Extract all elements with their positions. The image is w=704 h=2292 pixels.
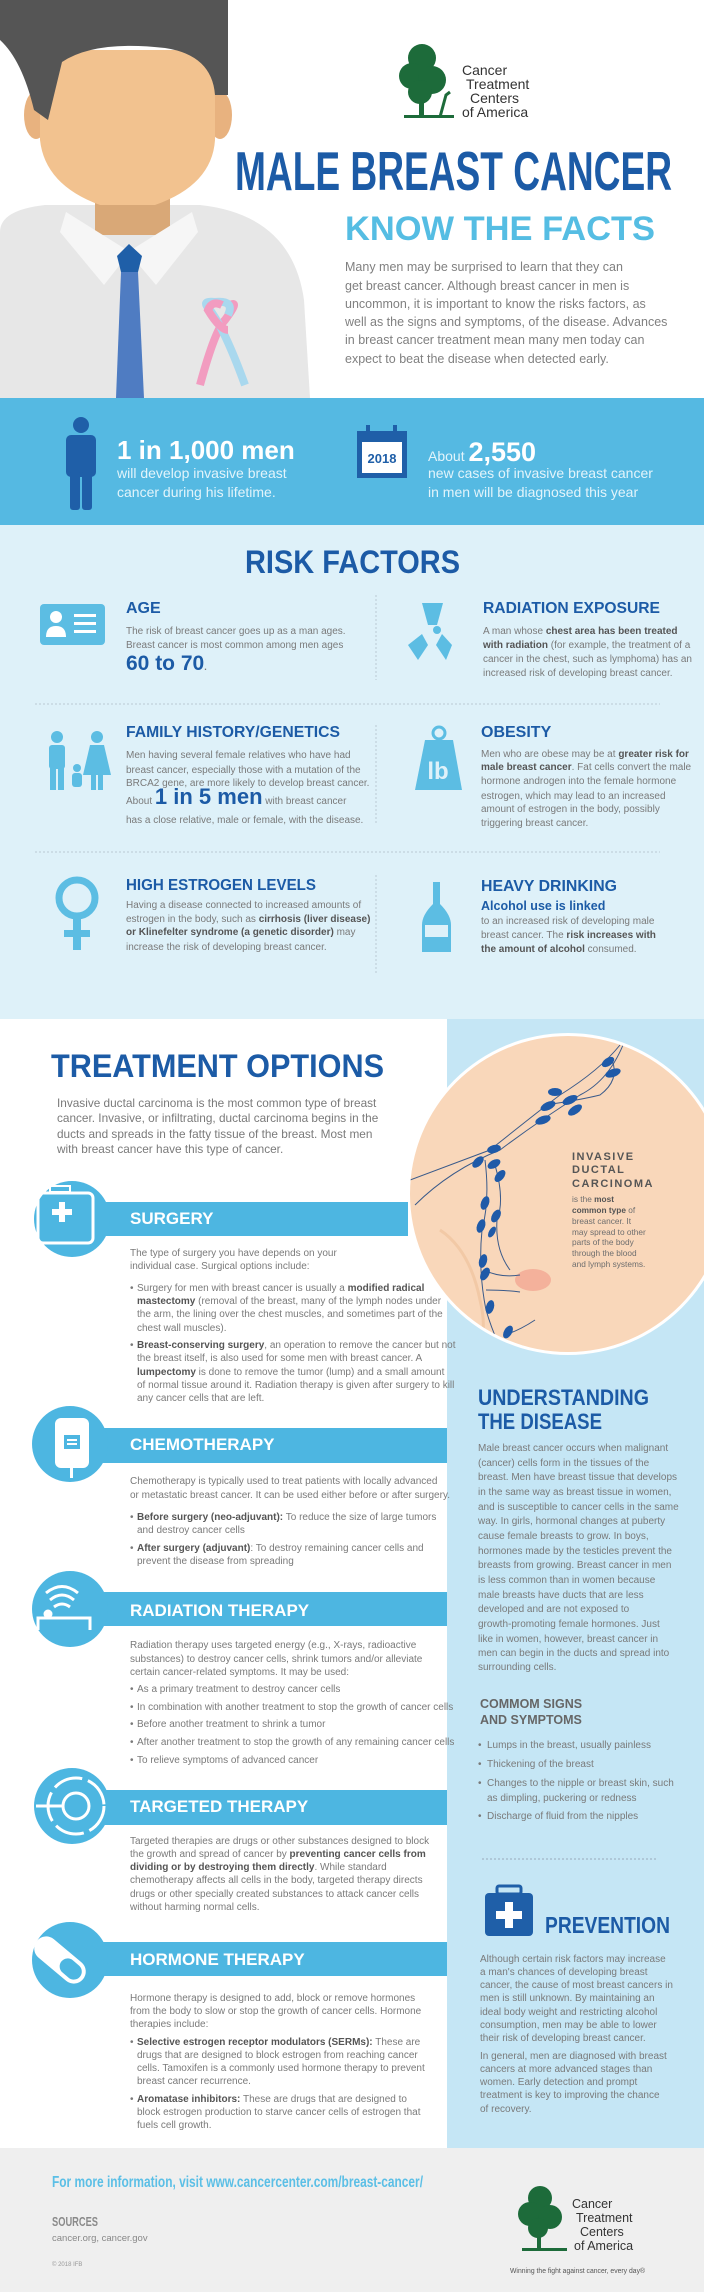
treatment: chemotherapy: Before surgery (neo-adjuvant): To reduce the size of large tumors <box>137 1512 436 1523</box>
icon: calendar 2018 <box>357 425 407 478</box>
treatment: chemotherapy: or metastatic breast cancer. It can be used either before or after surgery. <box>130 1490 450 1501</box>
treatment: radiation therapy: • <box>130 1755 134 1766</box>
risk: heavy drinking: Alcohol use is linked <box>481 899 605 913</box>
section: understanding the disease <box>477 1385 679 1673</box>
icon: calendar 2018: 2018 <box>368 451 396 466</box>
treatment intro: Invasive ductal carcinoma is the most common type of breast <box>57 1096 377 1110</box>
logo top: of America <box>462 104 528 120</box>
stat: 1 in 1,000: 1 in 1,000 men <box>117 435 295 465</box>
intro paragraph: Many men may be surprised to learn that they can <box>345 260 623 274</box>
stat: 1 in 1,000: cancer during his lifetime. <box>117 484 276 500</box>
treatment: radiation therapy: • <box>130 1719 134 1730</box>
risk: family history: BRCA2 gene, are more likely to develop breast cancer. <box>126 778 369 789</box>
footer: SOURCES <box>52 2214 98 2229</box>
section: understanding the disease: way. In girls, hormonal changes at puberty <box>477 1516 665 1527</box>
callout: invasive ductal carcinoma: through the blood <box>572 1248 637 1258</box>
callout: invasive ductal carcinoma: common type of <box>572 1205 636 1215</box>
risk: obesity <box>481 724 692 829</box>
section: common signs and symptoms: Discharge of fluid from the nipples <box>487 1811 638 1822</box>
risk: high estrogen: increase the risk of developing breast cancer. <box>126 942 327 953</box>
risk: radiation exposure: A man whose chest area has been treated <box>483 626 678 637</box>
section: common signs and symptoms: • <box>478 1759 482 1770</box>
intro paragraph: uncommon, it is important to know the risks factors, as <box>345 297 646 311</box>
treatment: surgery: SURGERY <box>130 1209 214 1228</box>
risk: family history: breast cancer, especially those with a mutation of the <box>126 765 361 776</box>
icon: female symbol <box>59 880 95 950</box>
footer: cancer.org, cancer.gov <box>52 2233 148 2244</box>
treatment: hormone therapy <box>29 1922 447 2131</box>
section: prevention: cancer, the cause of most breast cancers in <box>480 1980 673 1991</box>
risk: heavy drinking <box>481 878 656 955</box>
treatment: surgery: the arm, the lining over the chest muscles, and sometimes part of the <box>137 1309 443 1320</box>
treatment: radiation therapy <box>32 1571 454 1766</box>
section: understanding the disease: THE DISEASE <box>478 1409 602 1434</box>
header background <box>0 0 704 398</box>
treatment: radiation therapy: Radiation therapy uses targeted energy (e.g., X-rays, radioactive <box>130 1640 417 1651</box>
stat: 2,550 <box>428 437 653 500</box>
treatment: targeted therapy: the growth and spread of cancer by preventing cancer cells from <box>130 1849 426 1860</box>
section: understanding the disease: in the same way as breast tissue in women, <box>478 1487 671 1498</box>
section: common signs and symptoms: Lumps in the breast, usually painless <box>487 1740 651 1751</box>
treatment: hormone therapy: • <box>130 2094 134 2105</box>
risk: radiation exposure: RADIATION EXPOSURE <box>483 600 660 617</box>
treatment: surgery: individual case. Surgical options include: <box>130 1261 310 1272</box>
risk: family history: FAMILY HISTORY/GENETICS <box>126 724 340 741</box>
section: prevention: ideal body weight and restricting alcohol <box>480 2007 657 2018</box>
section: understanding the disease: breast. Men have breast tissue that develops <box>478 1472 677 1483</box>
risk: age <box>126 600 346 675</box>
logo footer <box>510 2186 646 2275</box>
icon: weight lb <box>415 727 462 790</box>
risk: age: AGE <box>126 600 161 617</box>
treatment: chemotherapy: • <box>130 1543 134 1554</box>
section: prevention <box>479 1912 673 2115</box>
risk: radiation exposure: increased risk of developing breast cancer. <box>483 668 673 679</box>
section: prevention: a man's chances of developing breast <box>480 1967 648 1978</box>
icon: man <box>66 417 96 510</box>
treatment: hormone therapy: Selective estrogen receptor modulators (SERMs): These are <box>137 2037 421 2048</box>
treatment: hormone therapy: block estrogen production to starve cancer cells of estrogen that <box>137 2107 421 2118</box>
treatment: hormone therapy: Hormone therapy is designed to add, block or remove hormones <box>130 1993 415 2004</box>
risk: family history: About 1 in 5 men with breast cancer <box>126 784 347 809</box>
footer: For more information, visit www.cancercenter.com/breast-cancer/ <box>52 2174 423 2191</box>
callout: invasive ductal carcinoma: CARCINOMA <box>572 1178 654 1190</box>
treatment: chemotherapy: CHEMOTHERAPY <box>130 1435 275 1454</box>
logo footer: Centers <box>580 2225 624 2239</box>
callout: invasive ductal carcinoma: breast cancer. It <box>572 1216 632 1226</box>
section: understanding the disease: like in women, however, breast cancer in <box>478 1634 658 1645</box>
heading: treatment options: TREATMENT OPTIONS <box>51 1048 384 1084</box>
treatment: targeted therapy: Targeted therapies are drugs or other substances designed to block <box>130 1836 430 1847</box>
callout: invasive ductal carcinoma: DUCTAL <box>572 1164 625 1176</box>
icon: radiation bed <box>38 1586 90 1630</box>
treatment: radiation therapy: To relieve symptoms of advanced cancer <box>137 1755 319 1766</box>
treatment: surgery: the breast itself, is also used for some men with breast cancer. A <box>137 1353 422 1364</box>
icon: id card <box>40 604 105 645</box>
heading: risk factors: RISK FACTORS <box>245 544 460 580</box>
icon: IV bag <box>55 1418 89 1478</box>
treatment: targeted therapy: chemotherapy affects all cells in the body, targeted therapy directs <box>130 1875 423 1886</box>
stat: 2,550: in men will be diagnosed this year <box>428 484 638 500</box>
icon: bottle <box>422 882 451 952</box>
risk: high estrogen: Having a disease connected to increased amounts of <box>126 900 361 911</box>
treatment: radiation therapy: • <box>130 1702 134 1713</box>
treatment: hormone therapy: breast cancer recurrence. <box>137 2076 251 2087</box>
panel: understanding (right background) <box>447 1019 704 2148</box>
risk: radiation exposure <box>482 600 692 679</box>
treatment: surgery: The type of surgery you have depends on your <box>130 1248 337 1259</box>
footer <box>0 2148 704 2292</box>
treatment: radiation therapy: • <box>130 1737 134 1748</box>
icon: radiation <box>408 603 452 660</box>
logo footer: Winning the fight against cancer, every day® <box>510 2267 646 2275</box>
treatment: surgery: of normal tissue around it. Radiation therapy is given after surgery to kill <box>137 1380 454 1391</box>
section: prevention: women. Early detection and prompt <box>479 2077 638 2088</box>
risk: radiation exposure: cancer in the chest, such as lymphoma) has an <box>483 654 692 665</box>
risk: obesity: hormone androgen into the female hormone <box>481 776 677 787</box>
stat: 1 in 1,000: will develop invasive breast <box>116 465 287 481</box>
treatment: chemotherapy: Chemotherapy is typically used to treat patients with locally advanced <box>130 1476 437 1487</box>
treatment intro: cancer. Invasive, or infiltrating, ductal carcinoma begins in the <box>57 1111 379 1125</box>
risk: high estrogen: estrogen in the body, such as cirrhosis (liver disease) <box>126 914 370 925</box>
section: understanding the disease: is less common than in women because <box>478 1575 656 1586</box>
intro paragraph: expect to beat the disease when detected early. <box>345 352 609 366</box>
risk: high estrogen: HIGH ESTROGEN LEVELS <box>126 877 316 894</box>
panel: risk factors <box>0 525 704 1019</box>
logo top: Centers <box>470 90 519 106</box>
treatment: radiation therapy: RADIATION THERAPY <box>130 1601 310 1620</box>
risk: heavy drinking: to an increased risk of developing male <box>481 916 655 927</box>
section: understanding the disease: Male breast cancer occurs when malignant <box>478 1443 668 1454</box>
treatment: surgery: Surgery for men with breast cancer is usually a modified radical <box>137 1283 425 1294</box>
intro paragraph <box>344 260 667 366</box>
stat: 2,550: new cases of invasive breast cancer <box>428 465 653 481</box>
section: understanding the disease: male breasts have ducts that are less <box>478 1590 644 1601</box>
icon: target <box>36 1778 104 1834</box>
section: common signs and symptoms: • <box>478 1740 482 1751</box>
logo footer: Cancer <box>572 2197 612 2211</box>
subtitle: KNOW THE FACTS <box>345 210 655 248</box>
risk: heavy drinking: the amount of alcohol consumed. <box>481 944 637 955</box>
risk: age: The risk of breast cancer goes up as a man ages. <box>126 626 346 637</box>
risk: obesity: OBESITY <box>481 724 552 741</box>
treatment: radiation therapy: • <box>130 1684 134 1695</box>
treatment intro: ducts and spreads in the fatty tissue of the breast. Most men <box>57 1127 372 1141</box>
treatment: radiation therapy: After another treatment to stop the growth of any remaining cancer cells <box>137 1737 454 1748</box>
footer: © 2018 IFB <box>52 2261 82 2268</box>
section: prevention: treatment is key to improving the chance <box>480 2090 660 2101</box>
risk: age: 60 to 70. <box>126 652 207 675</box>
risk: heavy drinking: breast cancer. The risk increases with <box>481 930 656 941</box>
treatment: hormone therapy: • <box>130 2037 134 2048</box>
treatment: hormone therapy: cells. Tamoxifen is a commonly used hormone therapy to prevent <box>137 2063 425 2074</box>
treatment: targeted therapy: dividing or by destroying them directly. While standard <box>130 1862 387 1873</box>
risk: family history: has a close relative, male or female, with the disease. <box>126 815 363 826</box>
section: understanding the disease: breasts from growing. Breast cancer in men <box>478 1560 671 1571</box>
section: common signs and symptoms: AND SYMPTOMS <box>480 1713 582 1727</box>
section: prevention: Although certain risk factors may increase <box>480 1954 666 1965</box>
section: prevention: PREVENTION <box>545 1912 670 1938</box>
section: understanding the disease: growth-promoting female hormones. Just <box>478 1619 660 1630</box>
stat: 2,550: About 2,550 <box>428 437 536 467</box>
treatment: targeted therapy <box>34 1768 447 1913</box>
section: prevention: of recovery. <box>480 2104 532 2115</box>
icon: prevention kit <box>485 1886 533 1936</box>
treatment: targeted therapy: drugs or other specially created substances to attack cancer cells <box>130 1889 419 1900</box>
illustration: lymph node diagram <box>407 1033 704 1360</box>
section: prevention: In general, men are diagnosed with breast <box>480 2051 667 2062</box>
icon: family <box>49 731 111 790</box>
treatment: chemotherapy: After surgery (adjuvant): To destroy remaining cancer cells and <box>137 1543 424 1554</box>
risk: high estrogen: or Klinefelter syndrome (a genetic disorder) may <box>126 927 356 938</box>
callout: invasive ductal carcinoma: is the most <box>572 1194 614 1204</box>
callout: invasive ductal carcinoma: and lymph systems. <box>572 1259 645 1269</box>
logo top <box>399 44 529 120</box>
section: understanding the disease: cause female breasts to grow. In boys, <box>478 1531 649 1542</box>
section: prevention: their risk of developing breast cancer. <box>480 2033 646 2044</box>
logo footer: Treatment <box>576 2211 633 2225</box>
treatment: hormone therapy: HORMONE THERAPY <box>130 1950 305 1969</box>
treatment: hormone therapy: Aromatase inhibitors: These are drugs that are designed to <box>137 2094 407 2105</box>
treatment: radiation therapy: As a primary treatment to destroy cancer cells <box>137 1684 340 1695</box>
treatment intro <box>56 1096 379 1156</box>
callout: invasive ductal carcinoma: parts of the body <box>572 1237 635 1247</box>
risk: obesity: Men who are obese may be at greater risk for <box>481 749 689 760</box>
section: prevention: men is still unknown. By maintaining an <box>480 1993 655 2004</box>
treatment: chemotherapy: and destroy cancer cells <box>137 1525 245 1536</box>
section: understanding the disease: and is susceptible to cancer cells in the same <box>478 1502 679 1513</box>
section: understanding the disease: hormones made by the testicles prevent the <box>478 1546 672 1557</box>
logo footer: of America <box>574 2239 633 2253</box>
illustration: man with ribbon <box>0 0 310 398</box>
treatment intro: with breast cancer have this type of cancer. <box>56 1142 283 1156</box>
risk: obesity: male breast cancer. Fat cells convert the male <box>481 762 692 773</box>
treatment: targeted therapy: without harming normal cells. <box>129 1902 260 1913</box>
section: understanding the disease: (cancer) cells form in the tissues of the <box>478 1458 650 1469</box>
treatment: radiation therapy: Before another treatment to shrink a tumor <box>137 1719 326 1730</box>
intro paragraph: get breast cancer. Although breast cancer in men is <box>345 279 629 293</box>
risk: age: Breast cancer is most common among men ages <box>126 640 343 651</box>
logo top: Cancer <box>462 62 507 78</box>
treatment: hormone therapy: fuels cell growth. <box>137 2120 211 2131</box>
risk: heavy drinking: HEAVY DRINKING <box>481 878 617 895</box>
treatment: surgery: • <box>130 1283 134 1294</box>
treatment: surgery: chest wall muscles). <box>137 1323 226 1334</box>
section: common signs and symptoms: • <box>478 1778 482 1789</box>
section: common signs and symptoms <box>478 1697 674 1822</box>
treatment: radiation therapy: substances) to destroy cancer cells, shrink tumors and/or alleviate <box>130 1654 423 1665</box>
intro paragraph: in breast cancer treatment mean many men today can <box>345 333 645 347</box>
treatment: radiation therapy: In combination with another treatment to stop the growth of cancer cells <box>137 1702 453 1713</box>
treatment: hormone therapy: therapies include: <box>130 2019 208 2030</box>
treatment: hormone therapy: drugs that are designed to block estrogen from reaching cancer <box>137 2050 418 2061</box>
section: common signs and symptoms: Changes to the nipple or breast skin, such <box>487 1778 674 1789</box>
risk: obesity: amount of estrogen in the body, possibly <box>481 804 660 815</box>
stats band <box>0 398 704 525</box>
icon: pill <box>29 1932 91 1988</box>
risk: radiation exposure: with radiation (for example, the treatment of a <box>482 640 691 651</box>
callout: invasive ductal carcinoma: INVASIVE <box>572 1151 635 1163</box>
logo top: Treatment <box>466 76 529 92</box>
section: common signs and symptoms: as dimpling, puckering or redness <box>487 1793 637 1804</box>
section: understanding the disease: men can begin in the ducts and spread into <box>478 1648 670 1659</box>
treatment: chemotherapy: • <box>130 1512 134 1523</box>
risk: family history <box>126 724 369 826</box>
section: common signs and symptoms: • <box>478 1811 482 1822</box>
section: understanding the disease: UNDERSTANDING <box>478 1385 649 1410</box>
treatment: surgery: any cancer cells that are left. <box>137 1393 264 1404</box>
callout: invasive ductal carcinoma <box>572 1151 654 1269</box>
icon: medical kit <box>38 1186 93 1243</box>
treatment: surgery: lumpectomy is done to remove the tumor (lump) and a small amount <box>137 1367 445 1378</box>
intro paragraph: well as the signs and symptoms, of the disease. Advances <box>344 315 667 329</box>
risk: family history: Men having several female relatives who have had <box>126 750 351 761</box>
treatment: surgery <box>34 1181 456 1404</box>
section: understanding the disease: surrounding cells. <box>478 1662 556 1673</box>
treatment: chemotherapy <box>32 1406 450 1567</box>
treatment: radiation therapy: certain cancer-related symptoms. It may be used: <box>130 1667 349 1678</box>
stat: 1 in 1,000 <box>116 435 295 500</box>
section: common signs and symptoms: COMMOM SIGNS <box>480 1697 582 1711</box>
treatment: targeted therapy: TARGETED THERAPY <box>130 1797 309 1816</box>
treatment: hormone therapy: from the body to slow or stop the growth of cancer cells. Hormone <box>130 2006 422 2017</box>
icon: weight lb: lb <box>427 758 449 785</box>
risk: obesity: estrogen, which may lead to an increased <box>481 791 666 802</box>
treatment: surgery: • <box>130 1340 134 1351</box>
risk: obesity: triggering breast cancer. <box>481 818 588 829</box>
section: prevention: cancers at more advanced stages than <box>480 2064 652 2075</box>
section: common signs and symptoms: Thickening of the breast <box>487 1759 594 1770</box>
treatment: surgery: mastectomy (removal of the breast, many of the lymph nodes under <box>137 1296 442 1307</box>
risk: high estrogen <box>126 877 370 953</box>
section: prevention: consumption, men may be able to lower <box>480 2020 657 2031</box>
section: understanding the disease: developed and are not exposed to <box>478 1604 630 1615</box>
treatment: chemotherapy: prevent the disease from spreading <box>137 1556 294 1567</box>
callout: invasive ductal carcinoma: may spread to other <box>572 1227 646 1237</box>
treatment: surgery: Breast-conserving surgery, an operation to remove the cancer but not <box>137 1340 456 1351</box>
